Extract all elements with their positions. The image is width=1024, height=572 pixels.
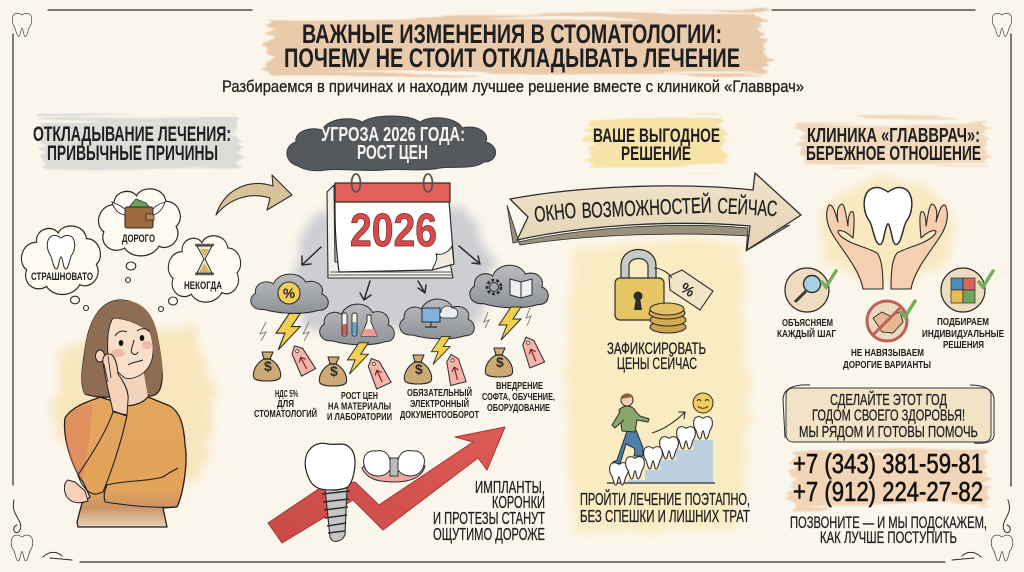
text: call us: КАК ЛУЧШЕ ПОСТУПИТЬ	[820, 529, 957, 547]
thought cloud: expensive	[99, 189, 180, 256]
ribbon arrow: ВОЗМОЖНОСТЕЙ	[581, 192, 712, 223]
storm cloud: materials: НА МАТЕРИАЛЫ	[328, 400, 391, 412]
thought cloud: scary	[21, 226, 100, 294]
storm cloud: VAT: $	[264, 358, 272, 374]
thought cloud: scary: СТРАШНОВАТО	[31, 271, 93, 283]
yellow background panel	[565, 240, 748, 532]
storm cloud: software: СОФТА, ОБУЧЕНИЕ,	[482, 391, 555, 403]
text: individual solutions: РЕШЕНИЯ	[943, 339, 984, 351]
text: implants more expensive: ИМПЛАНТЫ,	[475, 477, 545, 497]
text: individual solutions	[922, 316, 1004, 351]
storm cloud: materials	[319, 304, 394, 423]
panel: threat 2026	[251, 116, 555, 544]
icon: magnifier	[785, 268, 836, 312]
storm cloud: e-documents: ДОКУМЕНТООБОРОТ	[400, 409, 479, 421]
thought cloud: expensive: ДОРОГО	[122, 233, 155, 245]
storm cloud: materials: $	[330, 363, 338, 379]
text: explain each step	[777, 317, 836, 340]
ribbon arrow: СЕЙЧАС	[717, 193, 778, 221]
calendar 2026	[327, 174, 454, 278]
text: fix prices: ЗАФИКСИРОВАТЬ	[607, 339, 706, 358]
storm cloud: VAT: %	[283, 285, 296, 301]
text: no imposing: НЕ НАВЯЗЫВАЕМ	[851, 347, 924, 359]
storm cloud: e-documents	[400, 299, 479, 421]
storm cloud: e-documents: ЭЛЕКТРОННЫЙ	[410, 397, 469, 410]
thought cloud: no time: НЕКОГДА	[184, 280, 222, 292]
heading cloud	[287, 116, 496, 171]
storm cloud: e-documents: ОБЯЗАТЕЛЬНЫЙ	[407, 386, 472, 399]
stairs with teeth and man	[607, 393, 715, 485]
heading: reasons: ПРИВЫЧНЫЕ ПРИЧИНЫ	[47, 142, 218, 165]
text: explain each step: КАЖДЫЙ ШАГ	[777, 327, 836, 340]
text: stepwise treatment	[580, 488, 750, 526]
thought bubbles	[70, 262, 178, 312]
heading: solution: РЕШЕНИЕ	[621, 143, 691, 165]
title: ПОЧЕМУ НЕ СТОИТ ОТКЛАДЫВАТЬ ЛЕЧЕНИЕ	[284, 43, 740, 73]
arrows from calendar	[302, 246, 480, 300]
storm cloud: VAT: ДЛЯ	[277, 398, 294, 410]
text: implants more expensive	[433, 477, 545, 544]
text: fix prices	[607, 339, 706, 373]
storm cloud: software: $	[496, 354, 504, 370]
text: fix prices: ЦЕНЫ СЕЙЧАС	[617, 354, 697, 373]
heading cloud: УГРОЗА 2026 ГОДА:	[321, 124, 465, 146]
heading: solution: ВАШЕ ВЫГОДНОЕ	[593, 125, 720, 147]
arrow: curved tan	[216, 175, 292, 215]
panel: your solution	[507, 116, 801, 532]
heading: clinic	[800, 120, 988, 168]
storm cloud: e-documents: $	[415, 361, 423, 377]
ribbon arrow	[507, 173, 801, 251]
heading: reasons: ОТКЛАДЫВАНИЕ ЛЕЧЕНИЯ:	[33, 123, 231, 146]
heading: solution	[588, 116, 726, 168]
text: individual solutions: ПОДБИРАЕМ	[937, 316, 989, 328]
gray smoke backdrop	[292, 205, 495, 330]
title	[268, 13, 768, 74]
thought cloud: no time	[168, 236, 241, 302]
storm cloud: VAT: СТОМАТОЛОГИЙ	[254, 407, 317, 420]
denture bridge	[362, 451, 425, 482]
lock with price tag	[615, 250, 713, 333]
callout box: СДЕЛАЙТЕ ЭТОТ ГОД	[830, 390, 947, 409]
woman illustration	[50, 300, 218, 527]
storm cloud: VAT: НДС 5%	[275, 388, 298, 400]
text: no imposing	[843, 347, 931, 371]
storm cloud: materials: И ЛАБОРАТОРИИ	[327, 411, 392, 423]
text: implants more expensive: ОЩУТИМО ДОРОЖЕ	[433, 524, 545, 544]
panel: clinic	[777, 120, 1004, 547]
storm cloud: software: ВНЕДРЕНИЕ	[496, 380, 543, 392]
storm cloud: software	[470, 265, 555, 414]
panel: reasons	[21, 117, 241, 527]
storm cloud: VAT	[251, 274, 328, 420]
subtitle: Разбираемся в причинах и находим лучшее решение вместе с клиникой «Главврач»	[222, 77, 804, 96]
lock with price tag: %	[677, 280, 698, 301]
storm cloud: materials: РОСТ ЦЕН	[341, 390, 378, 402]
text: call us	[790, 514, 987, 547]
dental implant	[305, 443, 355, 541]
title: ВАЖНЫЕ ИЗМЕНЕНИЯ В СТОМАТОЛОГИИ:	[302, 19, 722, 49]
text: no imposing: ДОРОГИЕ ВАРИАНТЫ	[843, 359, 931, 371]
storm cloud: software: ОБОРУДОВАНИЕ	[487, 402, 550, 414]
phone numbers	[790, 448, 988, 509]
heading: reasons	[33, 117, 240, 171]
text: implants more expensive: КОРОНКИ	[492, 492, 545, 512]
calendar 2026: 2026	[350, 204, 437, 256]
text: stepwise treatment: БЕЗ СПЕШКИ И ЛИШНИХ ТРАТ	[580, 506, 750, 526]
text: explain each step: ОБЪЯСНЯЕМ	[782, 317, 833, 329]
red rising arrow	[268, 427, 505, 543]
ribbon arrow: ОКНО	[533, 198, 577, 227]
callout box	[783, 385, 994, 443]
icon: no imposing	[866, 300, 915, 342]
heading cloud: РОСТ ЦЕН	[357, 142, 428, 164]
hands holding tooth	[820, 180, 956, 289]
icon: puzzle	[941, 268, 993, 312]
text: implants more expensive: И ПРОТЕЗЫ СТАНУТ	[433, 508, 545, 528]
text: stepwise treatment: ПРОЙТИ ЛЕЧЕНИЕ ПОЭТАПНО,	[580, 488, 750, 509]
